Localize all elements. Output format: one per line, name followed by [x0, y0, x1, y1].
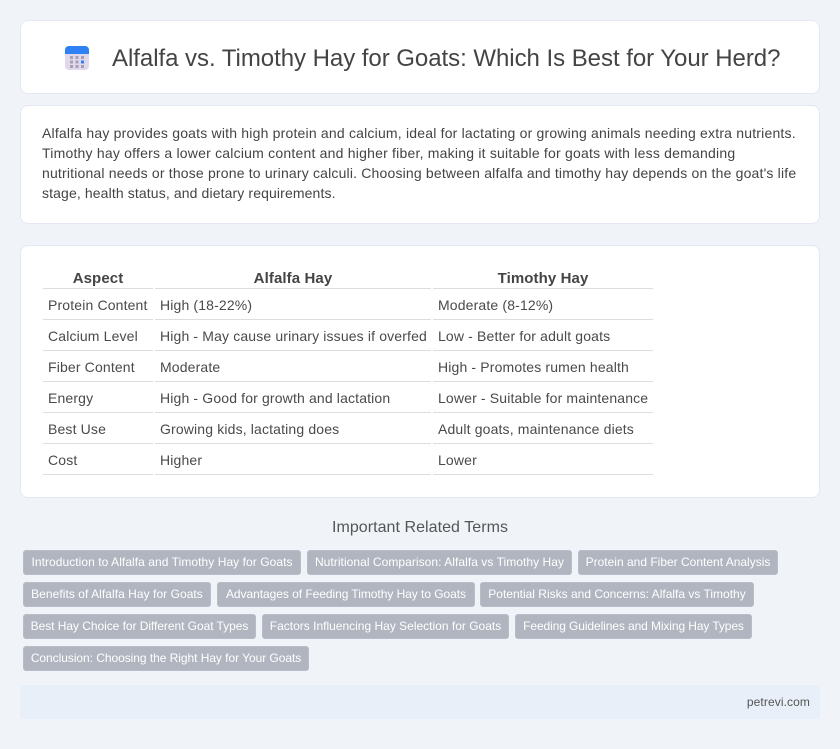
- panel: comparison table card: [20, 245, 820, 498]
- comparison table: Aspect: [73, 270, 123, 287]
- comparison table: Fiber Content: [48, 359, 135, 375]
- intro paragraph: stage, health status, and dietary requirements.: [42, 185, 336, 201]
- comparison table: High (18-22%): [160, 297, 252, 313]
- related term tags: Feeding Guidelines and Mixing Hay Types: [523, 619, 744, 633]
- intro paragraph: [42, 125, 796, 201]
- comparison table: High - Promotes rumen health: [438, 359, 629, 375]
- panel: title card: [20, 20, 820, 94]
- comparison table: Lower: [438, 452, 477, 468]
- comparison table: Higher: [160, 452, 202, 468]
- panel: intro text card: [20, 105, 820, 224]
- related term tags: Nutritional Comparison: Alfalfa vs Timothy Hay: [315, 555, 564, 569]
- related term tags: Potential Risks and Concerns: Alfalfa vs Timothy: [488, 587, 746, 601]
- icon: calendar: [65, 46, 89, 70]
- heading: important related terms: Important Related Terms: [332, 519, 508, 536]
- footer bar: [20, 685, 820, 719]
- footer source text: petrevi.com: [747, 695, 810, 709]
- comparison table: Cost: [48, 452, 77, 468]
- related term tags: Factors Influencing Hay Selection for Goats: [270, 619, 501, 633]
- intro paragraph: nutritional needs or those prone to urinary calculi. Choosing between alfalfa and timothy hay depends on the goat's life: [42, 165, 796, 181]
- comparison table: Timothy Hay: [498, 270, 588, 287]
- comparison table: Moderate (8-12%): [438, 297, 553, 313]
- intro paragraph: Alfalfa hay provides goats with high protein and calcium, ideal for lactating or growing animals needing extra nutrients.: [42, 125, 796, 141]
- related term tags: Conclusion: Choosing the Right Hay for Your Goats: [31, 651, 301, 665]
- comparison table: Lower - Suitable for maintenance: [438, 390, 648, 406]
- comparison table: High - Good for growth and lactation: [160, 390, 390, 406]
- related term tags: Benefits of Alfalfa Hay for Goats: [31, 587, 203, 601]
- comparison table: Energy: [48, 390, 93, 406]
- comparison table: Moderate: [160, 359, 220, 375]
- comparison table: Low - Better for adult goats: [438, 328, 610, 344]
- related term tags: Introduction to Alfalfa and Timothy Hay for Goats: [31, 555, 293, 569]
- related term tags: Best Hay Choice for Different Goat Types: [31, 619, 248, 633]
- comparison table: [43, 270, 653, 475]
- comparison table: Growing kids, lactating does: [160, 421, 339, 437]
- comparison table: Protein Content: [48, 297, 148, 313]
- intro paragraph: Timothy hay offers a lower calcium content and higher fiber, making it suitable for goats with less demanding: [42, 145, 735, 161]
- comparison table: Adult goats, maintenance diets: [438, 421, 634, 437]
- related term tags: [23, 550, 778, 671]
- title: Alfalfa vs. Timothy Hay for Goats: Which Is Best for Your Herd?: [112, 45, 780, 72]
- comparison table: Calcium Level: [48, 328, 138, 344]
- comparison table: Alfalfa Hay: [254, 270, 332, 287]
- comparison table: Best Use: [48, 421, 106, 437]
- comparison table: High - May cause urinary issues if overfed: [160, 328, 427, 344]
- related term tags: Protein and Fiber Content Analysis: [586, 555, 770, 569]
- related term tags: Advantages of Feeding Timothy Hay to Goats: [226, 587, 466, 601]
